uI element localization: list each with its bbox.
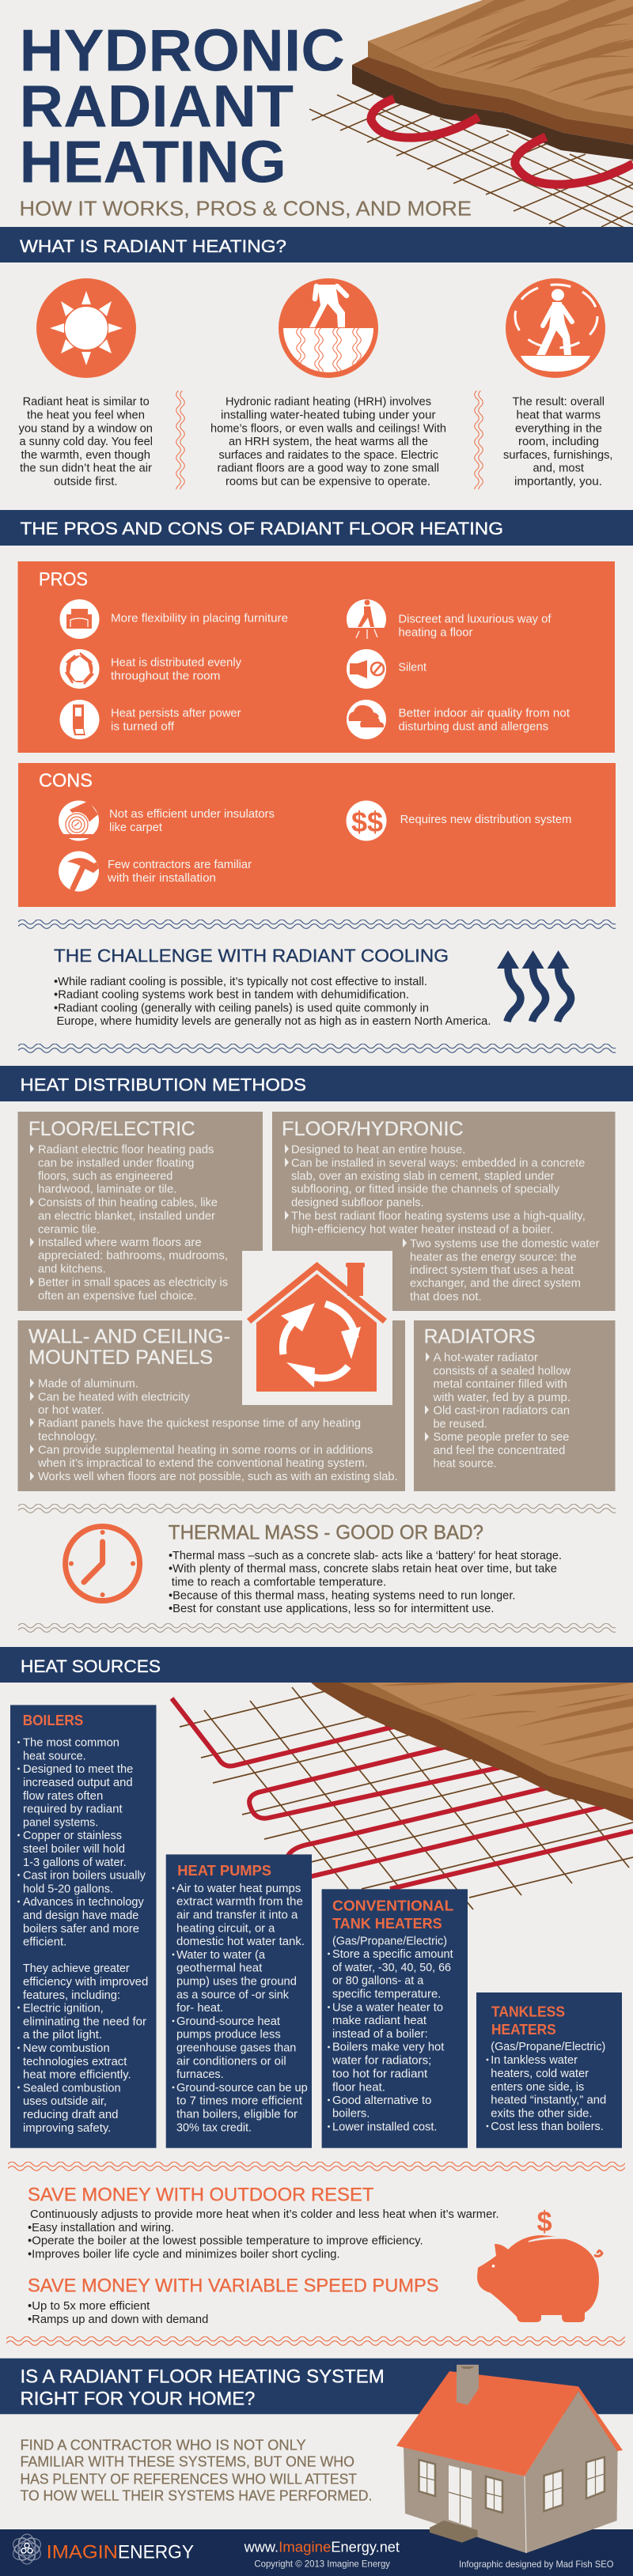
text: floor/hydronic bullets: heater as the energy source: the: [410, 1250, 577, 1263]
icon: circulating heat: [60, 649, 100, 689]
website url: www.: [244, 2540, 279, 2555]
text: heat pumps bullets: pump) uses the ground: [176, 1975, 297, 1988]
text: wall panels bullets: Made of aluminum.: [38, 1377, 138, 1390]
icon: person walking on warm floor: [279, 278, 378, 378]
text: radiators bullets: heat source.: [434, 1457, 497, 1471]
text: heat pumps bullets: Air to water heat pumps: [176, 1882, 301, 1895]
text: boilers bullets: eliminating the need for: [23, 2015, 146, 2028]
text: thermal mass bullets: •Because of this thermal mass, heating systems need to run longer.: [169, 1588, 516, 1602]
text: hydronic radiant heating explanation: installing water-heated tubing under your: [221, 408, 435, 422]
heading: conventional tank heaters: [332, 1898, 453, 1932]
text: wall panels bullets: Works well when floors are not possible, such as with an existing slab.: [38, 1470, 398, 1483]
section header: heat sources: [0, 1647, 633, 1683]
text: floor/electric bullets: hardwood, laminate or tile.: [38, 1183, 177, 1196]
text: the result: room, including: [518, 435, 599, 448]
text: floor/electric bullets: can be installed under floating: [38, 1156, 194, 1169]
heading: heat pumps: HEAT PUMPS: [177, 1863, 271, 1879]
text: heat pumps bullets: 30% tax credit.: [176, 2121, 252, 2134]
text: tankless heaters bullets: heated “instantly,” and: [491, 2094, 606, 2107]
text: conventional tank heaters bullets: Use a water heater to: [332, 2000, 443, 2014]
section header: pros and cons: [0, 510, 633, 546]
text: boilers bullets: The most common: [23, 1736, 119, 1750]
text: boilers bullets: steel boiler will hold: [23, 1842, 125, 1856]
text: challenge bullets: •While radiant cooling is possible, it’s typically not cost effective to install.: [54, 975, 427, 988]
text: floor/electric bullets: often an expensive fuel choice.: [38, 1289, 196, 1302]
text: boilers bullets: They achieve greater: [23, 1962, 130, 1975]
text: heat pumps bullets: extract warmth from the: [176, 1895, 303, 1909]
text: floor/hydronic bullets: Designed to heat an entire house.: [291, 1143, 465, 1157]
text: conventional tank heaters bullets: or 80 gallons- at a: [332, 1974, 424, 1988]
text: challenge bullets: Europe, where humidity levels are generally not as high as in eastern North America.: [57, 1014, 491, 1028]
text: radiant heat explanation: the sun didn’t heat the air: [20, 462, 152, 475]
heading: variable speed pumps: SAVE MONEY WITH VARIABLE SPEED PUMPS: [28, 2275, 439, 2296]
text: hydronic radiant heating explanation: home’s floors, or even walls and ceilings! With: [210, 421, 446, 435]
panel: wall and ceiling mounted panels: [17, 1320, 405, 1491]
pro: air quality: [399, 707, 570, 733]
text: the result: everything in the: [515, 421, 602, 435]
text: boilers bullets: increased output and: [23, 1776, 133, 1789]
text: hydronic radiant heating explanation: an HRH system, the heat warms all the: [229, 435, 428, 448]
text: conventional tank heaters bullets: specific temperature.: [332, 1988, 441, 2000]
text: floor/hydronic bullets: The best radiant floor heating systems use a high-quality,: [291, 1209, 586, 1222]
heading: challenge: THE CHALLENGE WITH RADIANT COOLING: [54, 946, 449, 966]
text: boilers bullets: New combustion: [23, 2042, 110, 2055]
text: tankless heaters bullets: Cost less than boilers.: [491, 2120, 604, 2133]
con: distribution system: Requires new distribution system: [400, 813, 571, 826]
text: hydronic radiant heating explanation: Hydronic radiant heating (HRH) involves: [226, 395, 431, 409]
text: radiators bullets: metal container filled with: [434, 1377, 567, 1391]
text: floor/hydronic bullets: high-efficiency hot water heater instead of a boiler.: [291, 1222, 554, 1236]
text: boilers bullets: Sealed combustion: [23, 2081, 121, 2094]
text: wall panels bullets: [30, 1377, 398, 1483]
section header: heat distribution methods: [0, 1066, 633, 1101]
text: the result: [503, 395, 612, 488]
text: radiant heat explanation: a sunny cold day. You feel: [19, 435, 153, 448]
text: boilers bullets: a the pilot light.: [23, 2028, 102, 2042]
text: floor/electric bullets: Radiant electric floor heating pads: [38, 1143, 214, 1157]
icon: thermal column: [60, 700, 100, 739]
text: boilers bullets: flow rates often: [23, 1789, 103, 1803]
text: heat pumps bullets: to 7 times more efficient: [176, 2094, 303, 2108]
text: floor/electric bullets: Better in small spaces as electricity is: [38, 1276, 228, 1290]
text: radiators bullets: with water, fed by a pump.: [433, 1391, 570, 1404]
text: radiant heat explanation: the warmth, even though: [21, 448, 150, 462]
icon: hammer: [59, 851, 99, 892]
pro: discreet: heating a floor: [399, 625, 473, 639]
text: tankless heaters bullets: In tankless water: [491, 2053, 578, 2067]
text: challenge bullets: [54, 975, 491, 1028]
section header: is a radiant floor heating system right for your home: [0, 2359, 633, 2414]
text: tankless heaters bullets: [487, 2040, 606, 2133]
text: outdoor reset: Continuously adjusts to provide more heat when it’s colder and less heat when it’s warmer.: [30, 2208, 499, 2221]
text: heat pumps bullets: as a source of -or sink: [176, 1988, 289, 2001]
text: radiant heat explanation: outside first.: [54, 474, 117, 488]
illustration: floor cross-section with radiant tubing: [309, 0, 633, 232]
panel: radiators: [414, 1320, 616, 1491]
panel: heat pumps: [166, 1854, 312, 2148]
text: contractor advice: FAMILIAR WITH THESE SYSTEMS, BUT ONE WHO: [21, 2453, 354, 2470]
text: thermal mass bullets: •Best for constant use applications, less so for intermittent use.: [169, 1602, 494, 1615]
text: contractor advice: HAS PLENTY OF REFERENCES WHO WILL ATTEST: [21, 2470, 357, 2487]
text: hydronic radiant heating explanation: [210, 395, 446, 488]
section header: what is radiant heating: [0, 227, 633, 263]
text: outdoor reset: •Improves boiler life cycle and minimizes boiler short cycling.: [28, 2247, 340, 2261]
text: contractor advice: [21, 2436, 372, 2504]
text: the result: and, most: [533, 462, 585, 475]
logo wordmark: IMAGIN: [47, 2542, 118, 2563]
text: floor/hydronic bullets: exchanger, and the direct system: [410, 1277, 581, 1290]
section header: is a radiant floor heating system right for your home: IS A RADIANT FLOOR HEATING SYSTEM: [21, 2366, 385, 2387]
front step: [430, 2521, 478, 2543]
text: conventional tank heaters bullets: of water, -30, 40, 50, 66: [332, 1961, 451, 1974]
text: variable speed pumps: [28, 2299, 208, 2326]
panel: conventional tank heaters: [322, 1889, 468, 2148]
text: boilers bullets: panel systems.: [23, 1815, 98, 1829]
copyright: Copyright © 2013 Imagine Energy: [254, 2559, 390, 2570]
heading: floor/electric: FLOOR/ELECTRIC: [28, 1118, 195, 1140]
text: radiators bullets: consists of a sealed hollow: [434, 1364, 570, 1377]
heading: tankless heaters: [491, 2004, 565, 2038]
logo wordmark: ENERGY: [118, 2542, 194, 2563]
text: variable speed pumps: •Up to 5x more efficient: [28, 2299, 150, 2313]
text: floor/hydronic bullets: that does not.: [410, 1290, 482, 1304]
icon: rising heat arrows: [497, 950, 571, 1022]
pro: heat persists: is turned off: [111, 720, 175, 733]
panel: floor/electric: [17, 1112, 263, 1311]
heading: wall panels: WALL- AND CEILING-: [28, 1325, 230, 1347]
text: radiators bullets: [425, 1351, 570, 1471]
heading: outdoor reset: SAVE MONEY WITH OUTDOOR RESET: [28, 2184, 374, 2205]
text: radiant heat explanation: you stand by a window on: [19, 421, 153, 435]
text: heat pumps bullets: air conditioners or oil: [176, 2054, 286, 2068]
subtitle: HOW IT WORKS, PROS & CONS, AND MORE: [19, 198, 472, 221]
section header: is a radiant floor heating system right for your home: RIGHT FOR YOUR HOME?: [21, 2389, 255, 2410]
text: conventional tank heaters bullets: Boilers make very hot: [332, 2041, 445, 2054]
text: boilers bullets: reducing draft and: [23, 2108, 119, 2121]
text: wall panels bullets: when it’s impractical to extend the conventional heating system.: [37, 1456, 368, 1470]
text: conventional tank heaters bullets: make radiant heat: [332, 2014, 427, 2027]
text: boilers bullets: heat source.: [23, 1749, 86, 1762]
logo wordmark: [47, 2542, 194, 2563]
text: radiators bullets: Some people prefer to see: [434, 1430, 569, 1444]
heading: conventional tank heaters: TANK HEATERS: [332, 1916, 442, 1932]
text: hydronic radiant heating explanation: rooms but can be expensive to operate.: [226, 474, 430, 488]
website url: Energy.net: [331, 2540, 400, 2555]
callout: thermal mass: [169, 1522, 562, 1615]
text: boilers bullets: Copper or stainless: [23, 1829, 122, 1842]
text: thermal mass bullets: •Thermal mass –such as a concrete slab- acts like a ‘battery’ for heat storage.: [169, 1549, 562, 1562]
block: save money with variable speed pumps: [28, 2275, 439, 2326]
text: radiators bullets: Old cast-iron radiators can: [434, 1404, 570, 1418]
pro: silent: Silent: [399, 661, 427, 674]
text: hydronic radiant heating explanation: surfaces and raidates to the space. Electric: [218, 448, 438, 462]
text: boilers bullets: Cast iron boilers usually: [23, 1869, 146, 1883]
text: boilers bullets: Advances in technology: [23, 1895, 144, 1909]
text: conventional tank heaters bullets: (Gas/Propane/Electric): [332, 1934, 447, 1947]
text: boilers bullets: technologies extract: [23, 2055, 127, 2068]
website url: Imagine: [279, 2540, 331, 2555]
icon: carpet roll: [59, 800, 99, 841]
text: floor/electric bullets: and kitchens.: [38, 1263, 106, 1276]
text: heat pumps bullets: air and transfer it into a: [176, 1909, 298, 1921]
text: tankless heaters bullets: heaters, cold water: [491, 2067, 589, 2080]
text: heat pumps bullets: Water to water (a: [176, 1948, 266, 1962]
website url: [244, 2540, 400, 2555]
icon: clouds: [347, 700, 386, 739]
text: radiant heat explanation: Radiant heat is similar to: [23, 395, 150, 409]
text: the result: heat that warms: [516, 408, 601, 422]
panel: pros: [17, 561, 615, 753]
pro: heat persists: Heat persists after power: [111, 707, 241, 720]
text: radiators bullets: be reused.: [434, 1417, 487, 1430]
icon: piggy bank: $: [537, 2205, 552, 2238]
con: contractors: Few contractors are familiar: [108, 858, 252, 871]
text: challenge bullets: •Radiant cooling systems work best in tandem with dehumidification.: [54, 988, 409, 1002]
text: radiant heat explanation: the heat you feel when: [27, 408, 145, 422]
title: RADIANT: [19, 73, 294, 139]
icon: dollar signs: $$: [351, 806, 383, 838]
heading: tankless heaters: HEATERS: [491, 2022, 556, 2038]
text: boilers bullets: heat more efficiently.: [23, 2068, 131, 2082]
text: thermal mass bullets: [169, 1549, 562, 1615]
section header: heat distribution methods: HEAT DISTRIBUTION METHODS: [21, 1075, 306, 1094]
heading: boilers: BOILERS: [23, 1713, 83, 1728]
text: heat pumps bullets: heating circuit, or a: [176, 1921, 275, 1935]
text: boilers bullets: efficiency with improved: [23, 1975, 148, 1989]
text: floor/electric bullets: appreciated: bathrooms, mudrooms,: [38, 1249, 228, 1263]
callout: the challenge with radiant cooling: [54, 946, 571, 1028]
text: floor/hydronic bullets: subflooring, or fitted inside the channels of specially: [291, 1183, 559, 1196]
text: boilers bullets: required by radiant: [23, 1803, 123, 1816]
text: floor/electric bullets: an electric blanket, installed under: [38, 1209, 215, 1222]
heading: wall panels: MOUNTED PANELS: [28, 1347, 213, 1369]
section header: pros and cons: THE PROS AND CONS OF RADIANT FLOOR HEATING: [21, 519, 503, 538]
text: conventional tank heaters bullets: boilers.: [332, 2107, 370, 2121]
panel: cons: [18, 763, 616, 907]
text: conventional tank heaters bullets: floor heat.: [332, 2080, 385, 2094]
text: floor/electric bullets: Consists of thin heating cables, like: [38, 1196, 218, 1210]
heading: thermal mass: THERMAL MASS - GOOD OR BAD?: [169, 1522, 483, 1544]
text: boilers bullets: and design have made: [23, 1909, 138, 1922]
heading: wall panels: [28, 1325, 230, 1369]
section header: what is radiant heating: WHAT IS RADIANT HEATING?: [20, 236, 286, 256]
text: thermal mass bullets: time to reach a comfortable temperature.: [172, 1575, 386, 1588]
con: insulators: [109, 807, 275, 834]
text: contractor advice: FIND A CONTRACTOR WHO IS NOT ONLY: [21, 2436, 306, 2453]
heading: pros: PROS: [39, 569, 88, 591]
text: heat pumps bullets: furnaces.: [176, 2068, 224, 2081]
text: floor/hydronic bullets: [285, 1143, 600, 1304]
designer credit: Infographic designed by Mad Fish SEO: [459, 2559, 614, 2570]
panel: boilers: [10, 1705, 157, 2148]
text: radiant heat explanation: [19, 395, 153, 488]
icon: dollar signs: [347, 800, 386, 841]
text: heat pumps bullets: Ground-source heat: [176, 2015, 281, 2028]
text: wall panels bullets: or hot water.: [38, 1403, 104, 1417]
text: challenge bullets: •Radiant cooling (generally with ceiling panels) is used quite commonly in: [54, 1001, 429, 1014]
text: conventional tank heaters bullets: Good alternative to: [332, 2094, 431, 2107]
pro: furniture: More flexibility in placing furniture: [111, 612, 288, 625]
text: floor/hydronic bullets: Can be installed in several ways: embedded in a concrete: [291, 1156, 585, 1169]
text: heat pumps bullets: than boilers, eligible for: [176, 2108, 298, 2121]
text: hydronic radiant heating explanation: radiant floors are a good way to zone small: [217, 462, 439, 475]
text: boilers bullets: improving safety.: [23, 2121, 111, 2135]
icon: clock: [66, 1526, 140, 1600]
text: tankless heaters bullets: (Gas/Propane/Electric): [491, 2040, 605, 2053]
con: insulators: Not as efficient under insulators: [109, 807, 275, 821]
text: the result: The result: overall: [513, 395, 605, 409]
text: outdoor reset: [28, 2208, 499, 2261]
icon: piggy bank: [477, 2205, 602, 2322]
pro: discreet: Discreet and luxurious way of: [399, 613, 552, 626]
pro: air quality: Better indoor air quality from not: [399, 707, 570, 720]
text: conventional tank heaters bullets: water for radiators;: [332, 2054, 431, 2067]
text: boilers bullets: [17, 1736, 148, 2135]
text: conventional tank heaters bullets: Store a specific amount: [332, 1947, 454, 1961]
text: conventional tank heaters bullets: instead of a boiler:: [332, 2027, 428, 2041]
text: floor/electric bullets: floors, such as engineered: [38, 1169, 172, 1183]
text: radiators bullets: and feel the concentrated: [434, 1444, 565, 1457]
heading: radiators: RADIATORS: [424, 1325, 535, 1347]
con: contractors: [107, 858, 252, 885]
text: floor/hydronic bullets: indirect system that uses a heat: [410, 1263, 574, 1277]
heading: conventional tank heaters: CONVENTIONAL: [332, 1898, 453, 1913]
text: heat pumps bullets: geothermal heat: [176, 1962, 263, 1975]
text: wall panels bullets: Can provide supplemental heating in some rooms or in additions: [38, 1443, 373, 1456]
panel: tankless heaters: [476, 1992, 622, 2148]
block: save money with outdoor reset: [28, 2184, 499, 2261]
text: heat pumps bullets: Ground-source can be up: [176, 2081, 308, 2094]
text: boilers bullets: efficient.: [23, 1936, 66, 1949]
text: floor/hydronic bullets: slab, over an existing slab in cement, stapled under: [291, 1169, 555, 1183]
heading: floor/hydronic: FLOOR/HYDRONIC: [282, 1118, 464, 1140]
pro: discreet: [399, 613, 552, 639]
text: boilers bullets: 1-3 gallons of water.: [23, 1856, 127, 1869]
text: conventional tank heaters bullets: Lower installed cost.: [332, 2121, 437, 2133]
pro: air quality: disturbing dust and allergens: [399, 720, 548, 733]
title: HEATING: [19, 129, 286, 195]
icon: silent speaker: [347, 649, 386, 689]
illustration: tubing on mesh beneath floor: [169, 1683, 633, 1910]
icon: house with circular arrows: [247, 1262, 387, 1392]
text: variable speed pumps: •Ramps up and down with demand: [28, 2313, 208, 2326]
title: [19, 17, 345, 195]
heading: cons: CONS: [39, 770, 93, 791]
icon: walking on warm floor: [347, 599, 386, 639]
icon: person surrounded by circulating heat: [506, 278, 605, 378]
illustration: house: [396, 2365, 623, 2553]
text: outdoor reset: •Operate the boiler at the lowest possible temperature to improve efficiency.: [28, 2234, 423, 2248]
text: the result: importantly, you.: [514, 474, 602, 488]
con: contractors: with their installation: [107, 871, 216, 885]
text: outdoor reset: •Easy installation and wiring.: [28, 2221, 174, 2234]
con: insulators: like carpet: [109, 821, 163, 834]
text: radiators bullets: A hot-water radiator: [434, 1351, 538, 1365]
text: boilers bullets: features, including:: [23, 1989, 120, 2002]
pro: distributed evenly: [111, 656, 241, 682]
section header: heat sources: HEAT SOURCES: [21, 1656, 161, 1676]
text: heat pumps bullets: pumps produce less: [176, 2028, 281, 2042]
icon: imagine energy logo: [9, 2534, 44, 2564]
pro: heat persists: [111, 707, 241, 733]
text: floor/hydronic bullets: Two systems use the domestic water: [410, 1237, 600, 1251]
text: tankless heaters bullets: exits the other side.: [491, 2106, 592, 2120]
text: conventional tank heaters bullets: [328, 1934, 454, 2133]
text: heat pumps bullets: greenhouse gases than: [176, 2042, 296, 2054]
text: wall panels bullets: Radiant panels have the quickest response time of any heating: [38, 1417, 361, 1430]
text: boilers bullets: Electric ignition,: [23, 2002, 104, 2015]
text: floor/hydronic bullets: designed subfloor panels.: [291, 1196, 424, 1210]
icon: sun: [36, 278, 136, 378]
text: conventional tank heaters bullets: too hot for radiant: [332, 2067, 428, 2080]
icon: armchair: [60, 599, 100, 639]
text: floor/electric bullets: [30, 1143, 228, 1302]
footer: [0, 2529, 633, 2576]
text: boilers bullets: uses outside air,: [23, 2094, 107, 2108]
text: heat pumps bullets: for- heat.: [176, 2001, 223, 2015]
text: boilers bullets: boilers safer and more: [23, 1922, 139, 1936]
title: HYDRONIC: [19, 17, 345, 83]
text: contractor advice: TO HOW WELL THEIR SYSTEMS HAVE PERFORMED.: [21, 2487, 372, 2504]
text: the result: surfaces, furnishings,: [503, 448, 612, 462]
heading: tankless heaters: TANKLESS: [491, 2004, 565, 2020]
text: boilers bullets: hold 5-20 gallons.: [23, 1882, 113, 1895]
text: floor/electric bullets: ceramic tile.: [38, 1222, 100, 1236]
text: wall panels bullets: technology.: [38, 1430, 97, 1444]
text: heat pumps bullets: domestic hot water tank.: [176, 1935, 305, 1948]
text: floor/electric bullets: Installed where warm floors are: [38, 1236, 202, 1249]
text: boilers bullets: Designed to meet the: [23, 1762, 133, 1776]
text: wall panels bullets: Can be heated with electricity: [38, 1390, 190, 1403]
panel: floor/hydronic: [272, 1112, 616, 1311]
pro: distributed evenly: throughout the room: [111, 669, 220, 682]
pro: distributed evenly: Heat is distributed evenly: [111, 656, 241, 670]
text: thermal mass bullets: •With plenty of thermal mass, concrete slabs retain heat over time, but take: [169, 1562, 557, 1576]
text: heat pumps bullets: [172, 1882, 308, 2134]
text: tankless heaters bullets: enters one side, is: [491, 2080, 584, 2094]
